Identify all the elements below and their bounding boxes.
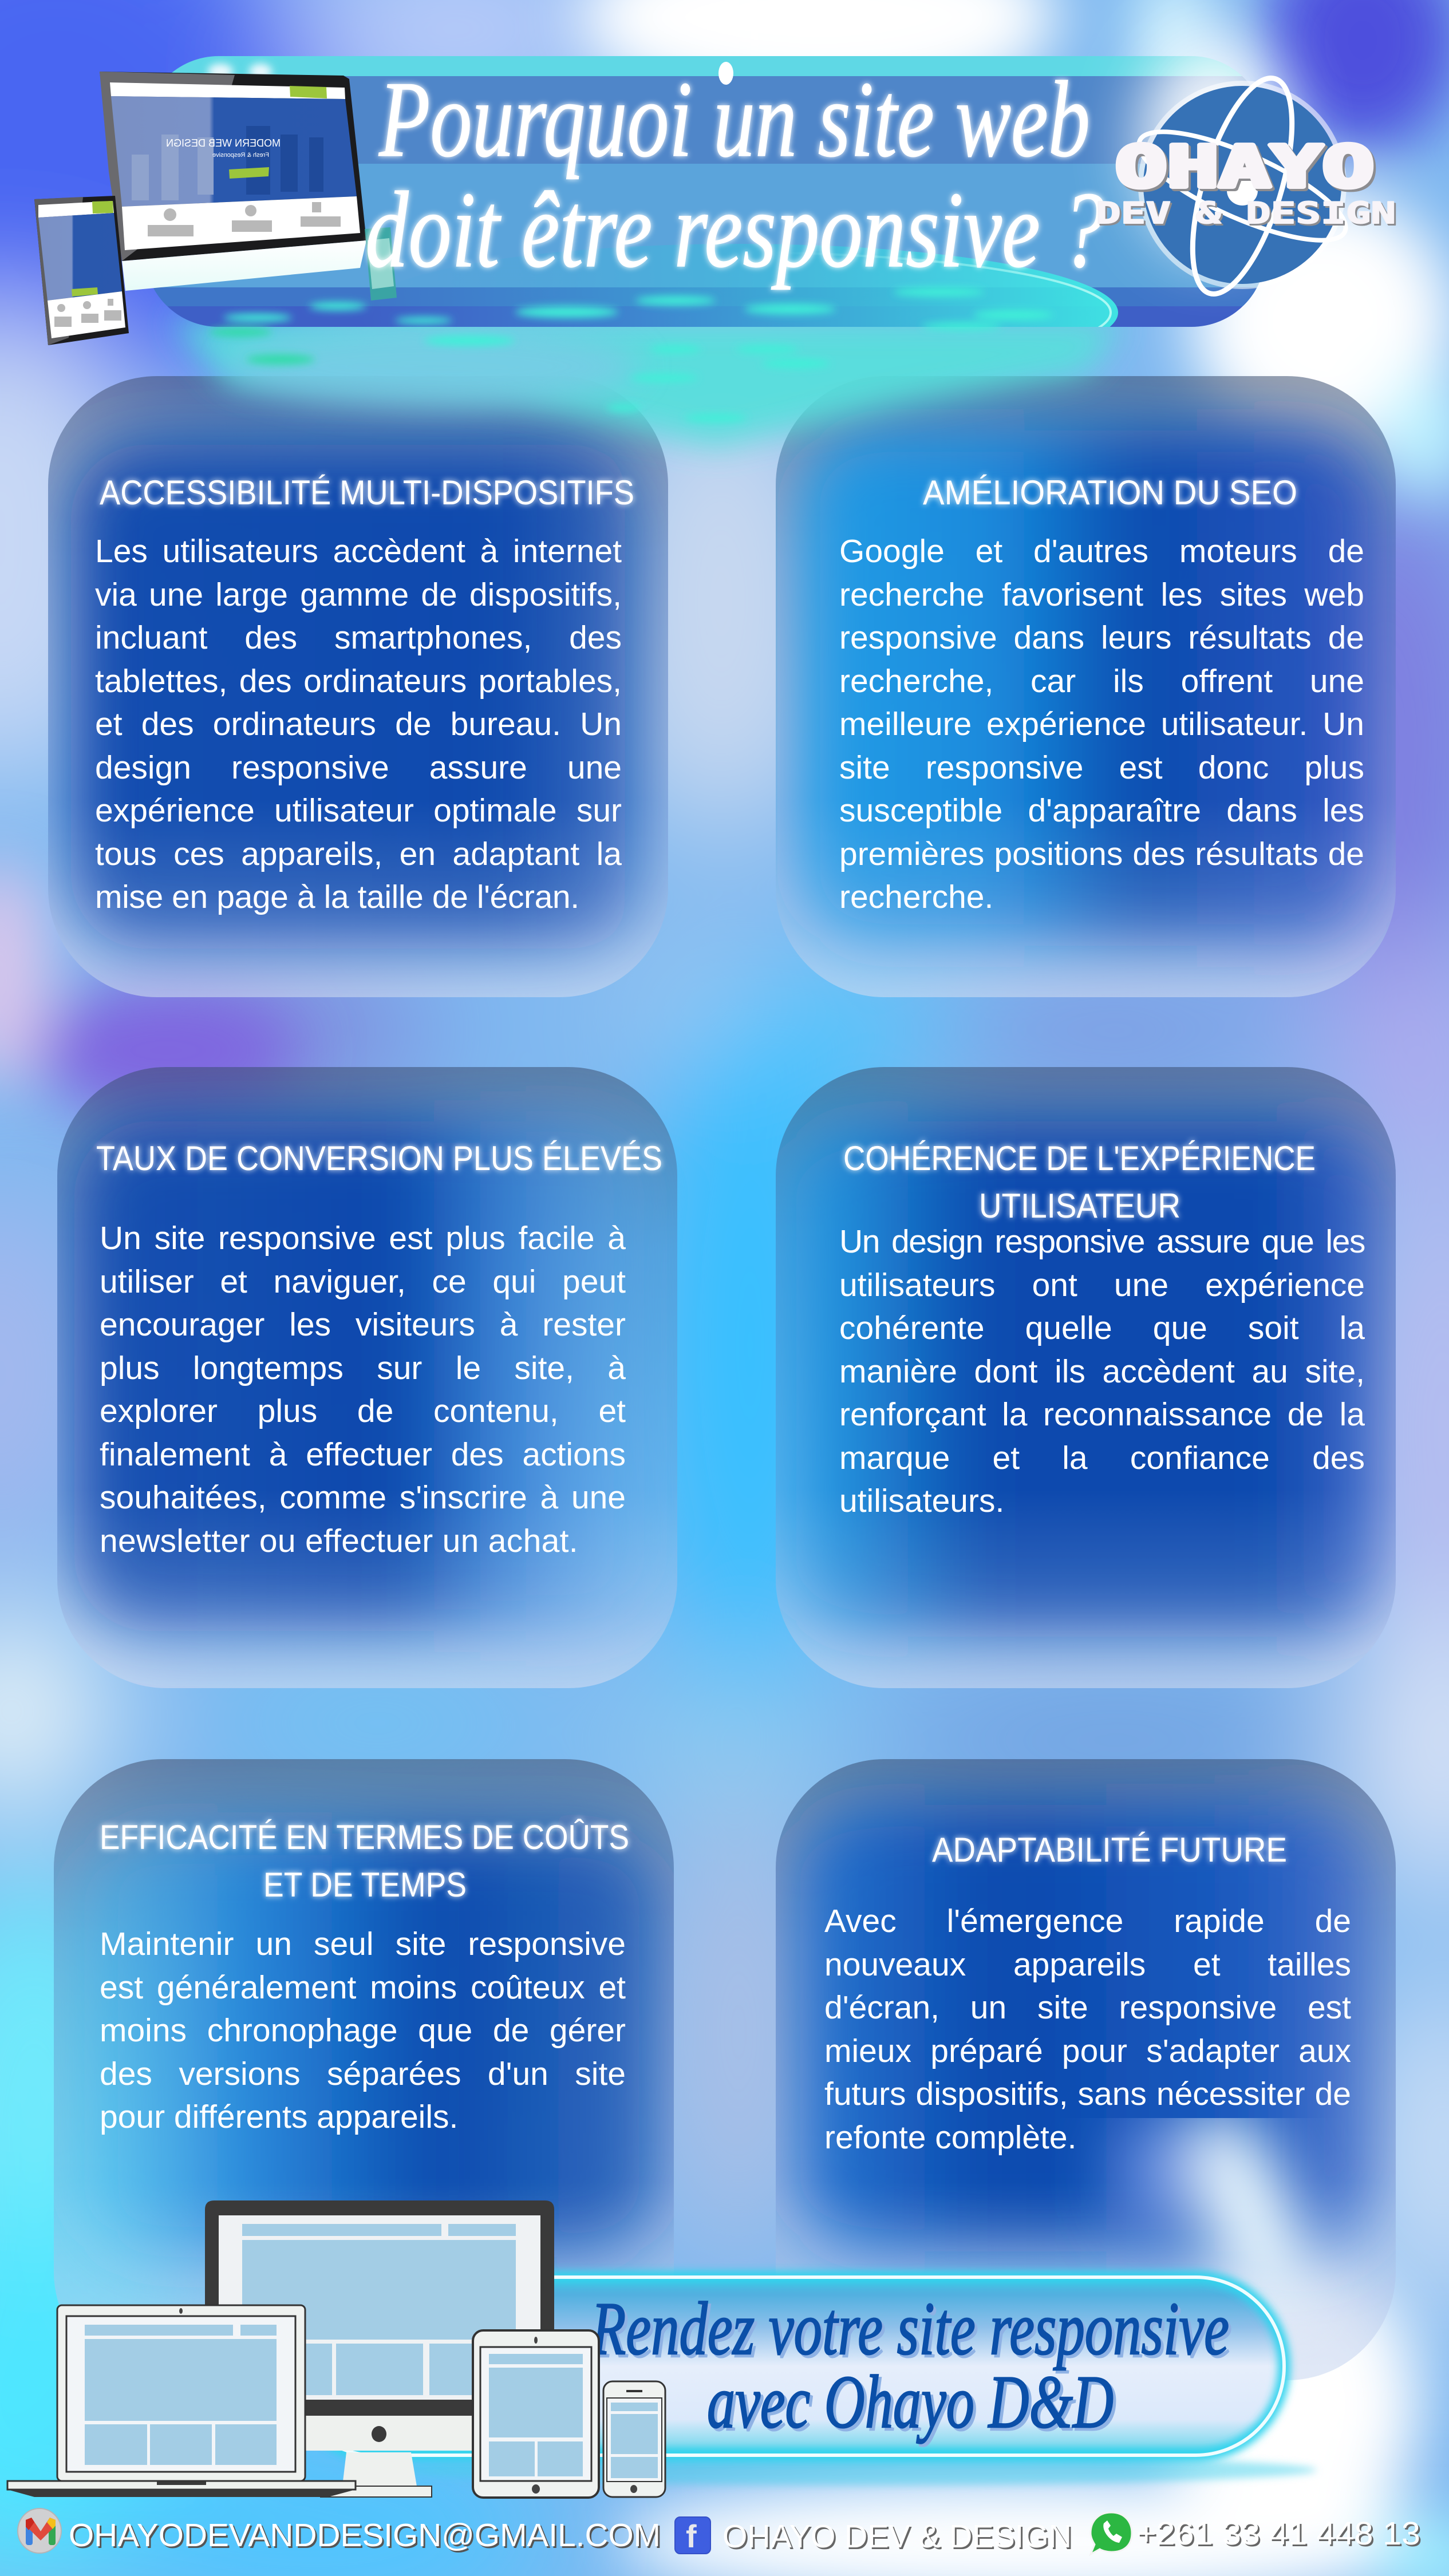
panel: accessibilité multi-dispositifs <box>48 376 668 997</box>
body text: recherche favorisent les sites web <box>839 576 1364 613</box>
glass background <box>776 1067 1396 1688</box>
banner text: Rendez votre site responsive <box>591 2286 1229 2370</box>
banner text: avec Ohayo D&D <box>707 2360 1114 2444</box>
panel: amélioration du SEO <box>776 376 1396 997</box>
icon: facebook <box>675 2517 710 2554</box>
body text: site responsive est donc plus <box>839 749 1364 785</box>
glass background <box>57 1067 677 1688</box>
heading: ACCESSIBILITÉ MULTI-DISPOSITIFS <box>100 473 634 512</box>
body text: Les utilisateurs accèdent à internet <box>95 533 622 570</box>
glass background <box>48 376 668 997</box>
body text: design responsive assure une <box>95 749 622 785</box>
device mockup: small tablet <box>34 196 129 345</box>
title <box>365 60 1105 290</box>
device mockup: large tablet: Fresh & Responsive <box>212 152 269 159</box>
body text: marque et la confiance des <box>839 1439 1365 1476</box>
logo: Ohayo Dev & Design: OHAYO <box>1115 133 1374 200</box>
teal glow under title <box>172 321 1122 447</box>
body text: tablettes, des ordinateurs portables, <box>95 663 622 700</box>
body text: incluant des smartphones, des <box>95 619 622 656</box>
body text: Un design responsive assure que les <box>839 1223 1365 1260</box>
body text: meilleure expérience utilisateur. Un <box>839 706 1364 742</box>
body text: encourager les visiteurs à rester <box>100 1306 626 1343</box>
body text: plus longtemps sur le site, à <box>100 1350 626 1386</box>
heading: AMÉLIORATION DU SEO <box>923 473 1297 512</box>
panel: efficacité en termes de coûts et de temps <box>54 1759 674 2380</box>
body text: recherche, car ils offrent une <box>839 663 1364 700</box>
body text: nouveaux appareils et tailles <box>824 1946 1351 1983</box>
heading: EFFICACITÉ EN TERMES DE COÛTS <box>100 1818 629 1856</box>
device mockup: large tablet: MODERN WEB DESIGN <box>166 137 281 149</box>
body text: cohérente quelle que soit la <box>839 1310 1365 1346</box>
heading <box>776 1067 1396 1688</box>
body text <box>839 1220 1365 1523</box>
body text: explorer plus de contenu, et <box>100 1393 626 1429</box>
body text: mieux préparé pour s'adapter aux <box>824 2032 1351 2069</box>
logo: Ohayo Dev & Design <box>1096 68 1396 305</box>
panel: taux de conversion <box>57 1067 677 1688</box>
footer graphics <box>0 2118 1449 2576</box>
white haze at right of banner <box>1139 34 1288 252</box>
glass background <box>54 1759 674 2380</box>
body text: utiliser et naviguer, ce qui peut <box>100 1263 626 1299</box>
logo: Ohayo Dev & Design: DEV & DESIGN <box>1096 196 1396 231</box>
body text: refonte complète. <box>824 2119 1076 2156</box>
device icon: laptop <box>7 2305 356 2497</box>
body text: expérience utilisateur optimale sur <box>95 792 622 829</box>
device icon: tablet <box>473 2330 599 2498</box>
body text: responsive dans leurs résultats de <box>839 619 1364 656</box>
device mockup: phone <box>365 227 397 301</box>
heading: ET DE TEMPS <box>263 1866 467 1904</box>
glass background <box>776 376 1396 997</box>
heading: UTILISATEUR <box>979 1187 1180 1225</box>
body text: manière dont ils accèdent au site, <box>839 1353 1365 1390</box>
device icon: phone <box>603 2381 665 2497</box>
panel: cohérence de l'expérience utilisateur <box>776 1067 1396 1688</box>
heading: TAUX DE CONVERSION PLUS ÉLEVÉS <box>96 1139 662 1178</box>
body text: Un site responsive est plus facile à <box>100 1220 626 1257</box>
body text: renforçant la reconnaissance de la <box>839 1396 1365 1433</box>
body text: via une large gamme de dispositifs, <box>95 576 622 613</box>
body text: mise en page à la taille de l'écran. <box>95 879 579 915</box>
teal light dots <box>209 287 1053 422</box>
body text: utilisateurs ont une expérience <box>839 1266 1365 1303</box>
body text: moins chronophage que de gérer <box>100 2012 626 2049</box>
body text: Google et d'autres moteurs de <box>839 533 1364 570</box>
body text: est généralement moins coûteux et <box>100 1969 626 2006</box>
facebook name: OHAYO DEV & DESIGN <box>722 2518 1072 2555</box>
device icon: desktop monitor <box>205 2200 554 2497</box>
body text: d'écran, un site responsive est <box>824 1989 1351 2026</box>
body text: Avec l'émergence rapide de <box>824 1903 1351 1939</box>
body text: des versions séparées d'un site <box>100 2055 626 2092</box>
icon: facebook: f <box>686 2518 697 2554</box>
body text: utilisateurs. <box>839 1483 1004 1519</box>
body text <box>100 1923 626 2139</box>
body text: et des ordinateurs de bureau. Un <box>95 706 622 742</box>
title: Pourquoi un site web <box>378 60 1090 180</box>
body text: newsletter ou effectuer un achat. <box>100 1523 578 1559</box>
body text: Maintenir un seul site responsive <box>100 1926 626 1962</box>
title banner <box>144 56 1266 381</box>
white light streak over lower right card <box>1116 2093 1325 2326</box>
body text <box>839 530 1364 919</box>
body text: recherche. <box>839 879 993 915</box>
body text <box>100 1217 626 1563</box>
email text: OHAYODEVANDDESIGN@GMAIL.COM <box>69 2517 661 2554</box>
body text <box>95 530 622 919</box>
body text: tous ces appareils, en adaptant la <box>95 836 622 872</box>
heading <box>54 1759 674 2380</box>
banner text <box>591 2286 1229 2444</box>
heading: COHÉRENCE DE L'EXPÉRIENCE <box>843 1139 1316 1178</box>
title: doit être responsive ? <box>365 170 1105 290</box>
icon: gmail <box>18 2508 61 2553</box>
body text: susceptible d'apparaître dans les <box>839 792 1364 829</box>
body text: pour différents appareils. <box>100 2099 458 2135</box>
heading: ADAPTABILITÉ FUTURE <box>932 1831 1287 1869</box>
bubbles <box>208 64 272 80</box>
body text: souhaitées, comme s'inscrire à une <box>100 1479 626 1516</box>
device mockup: large tablet <box>100 72 366 291</box>
body text: finalement à effectuer des actions <box>100 1436 626 1472</box>
call-to-action banner <box>286 2277 1317 2485</box>
phone number: +261 33 41 448 13 <box>1136 2515 1420 2552</box>
header graphics <box>0 0 1449 458</box>
glass background <box>776 1759 1396 2380</box>
icon: whatsapp <box>1091 2512 1132 2554</box>
body text: premières positions des résultats de <box>839 836 1364 872</box>
body text: futurs dispositifs, sans nécessiter de <box>824 2076 1351 2112</box>
panel: adaptabilité future <box>776 1759 1396 2380</box>
body text <box>824 1900 1351 2159</box>
